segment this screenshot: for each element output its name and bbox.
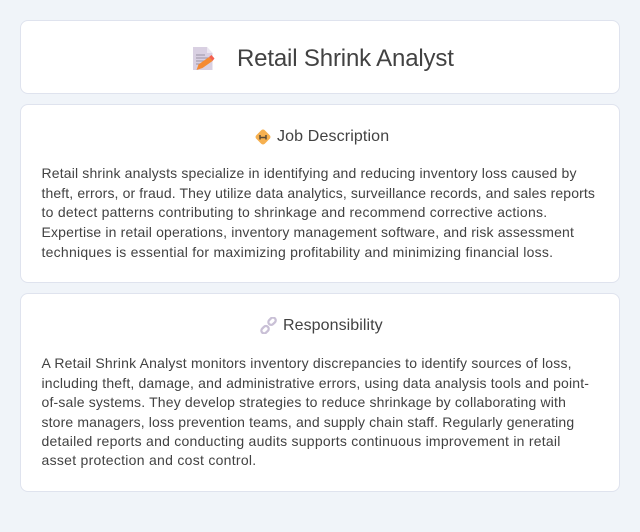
- panel: job description: [20, 104, 620, 283]
- panel: title: [20, 20, 620, 94]
- responsibility text: of-sale systems. They develop strategies to reduce shrinkage by collaborating with: [42, 394, 566, 410]
- heading: job description: Job Description: [277, 128, 389, 145]
- title text: Retail Shrink Analyst: [237, 45, 454, 72]
- job description text: Retail shrink analysts specialize in identifying and reducing inventory loss caused by: [42, 165, 577, 181]
- responsibility text: [42, 355, 589, 468]
- responsibility text: A Retail Shrink Analyst monitors inventory discrepancies to identify sources of loss,: [42, 355, 572, 371]
- responsibility text: including theft, damage, and administrative errors, using data analysis tools and point-: [42, 375, 589, 391]
- responsibility text: asset protection and cost control.: [42, 452, 256, 468]
- responsibility text: store managers, loss prevention teams, and supply chain staff. Regularly generating: [42, 414, 574, 430]
- panel: responsibility: [20, 293, 620, 492]
- job description text: techniques is essential for maximizing profitability and minimizing financial loss.: [42, 244, 553, 260]
- icon: document with pencil: [193, 47, 214, 70]
- responsibility text: detailed reports and conducting audits supports continuous improvement in retail: [42, 433, 561, 449]
- job description text: Expertise in retail operations, inventory management software, and risk assessment: [42, 224, 574, 240]
- job description text: theft, errors, or fraud. They utilize data analytics, surveillance records, and sales reports: [42, 185, 595, 201]
- icon: construction diamond: [256, 130, 270, 144]
- icon: link: [260, 317, 277, 334]
- job description text: to detect patterns contributing to shrinkage and recommend corrective actions.: [42, 204, 547, 220]
- job description text: [42, 165, 595, 260]
- heading: responsibility: Responsibility: [283, 317, 383, 334]
